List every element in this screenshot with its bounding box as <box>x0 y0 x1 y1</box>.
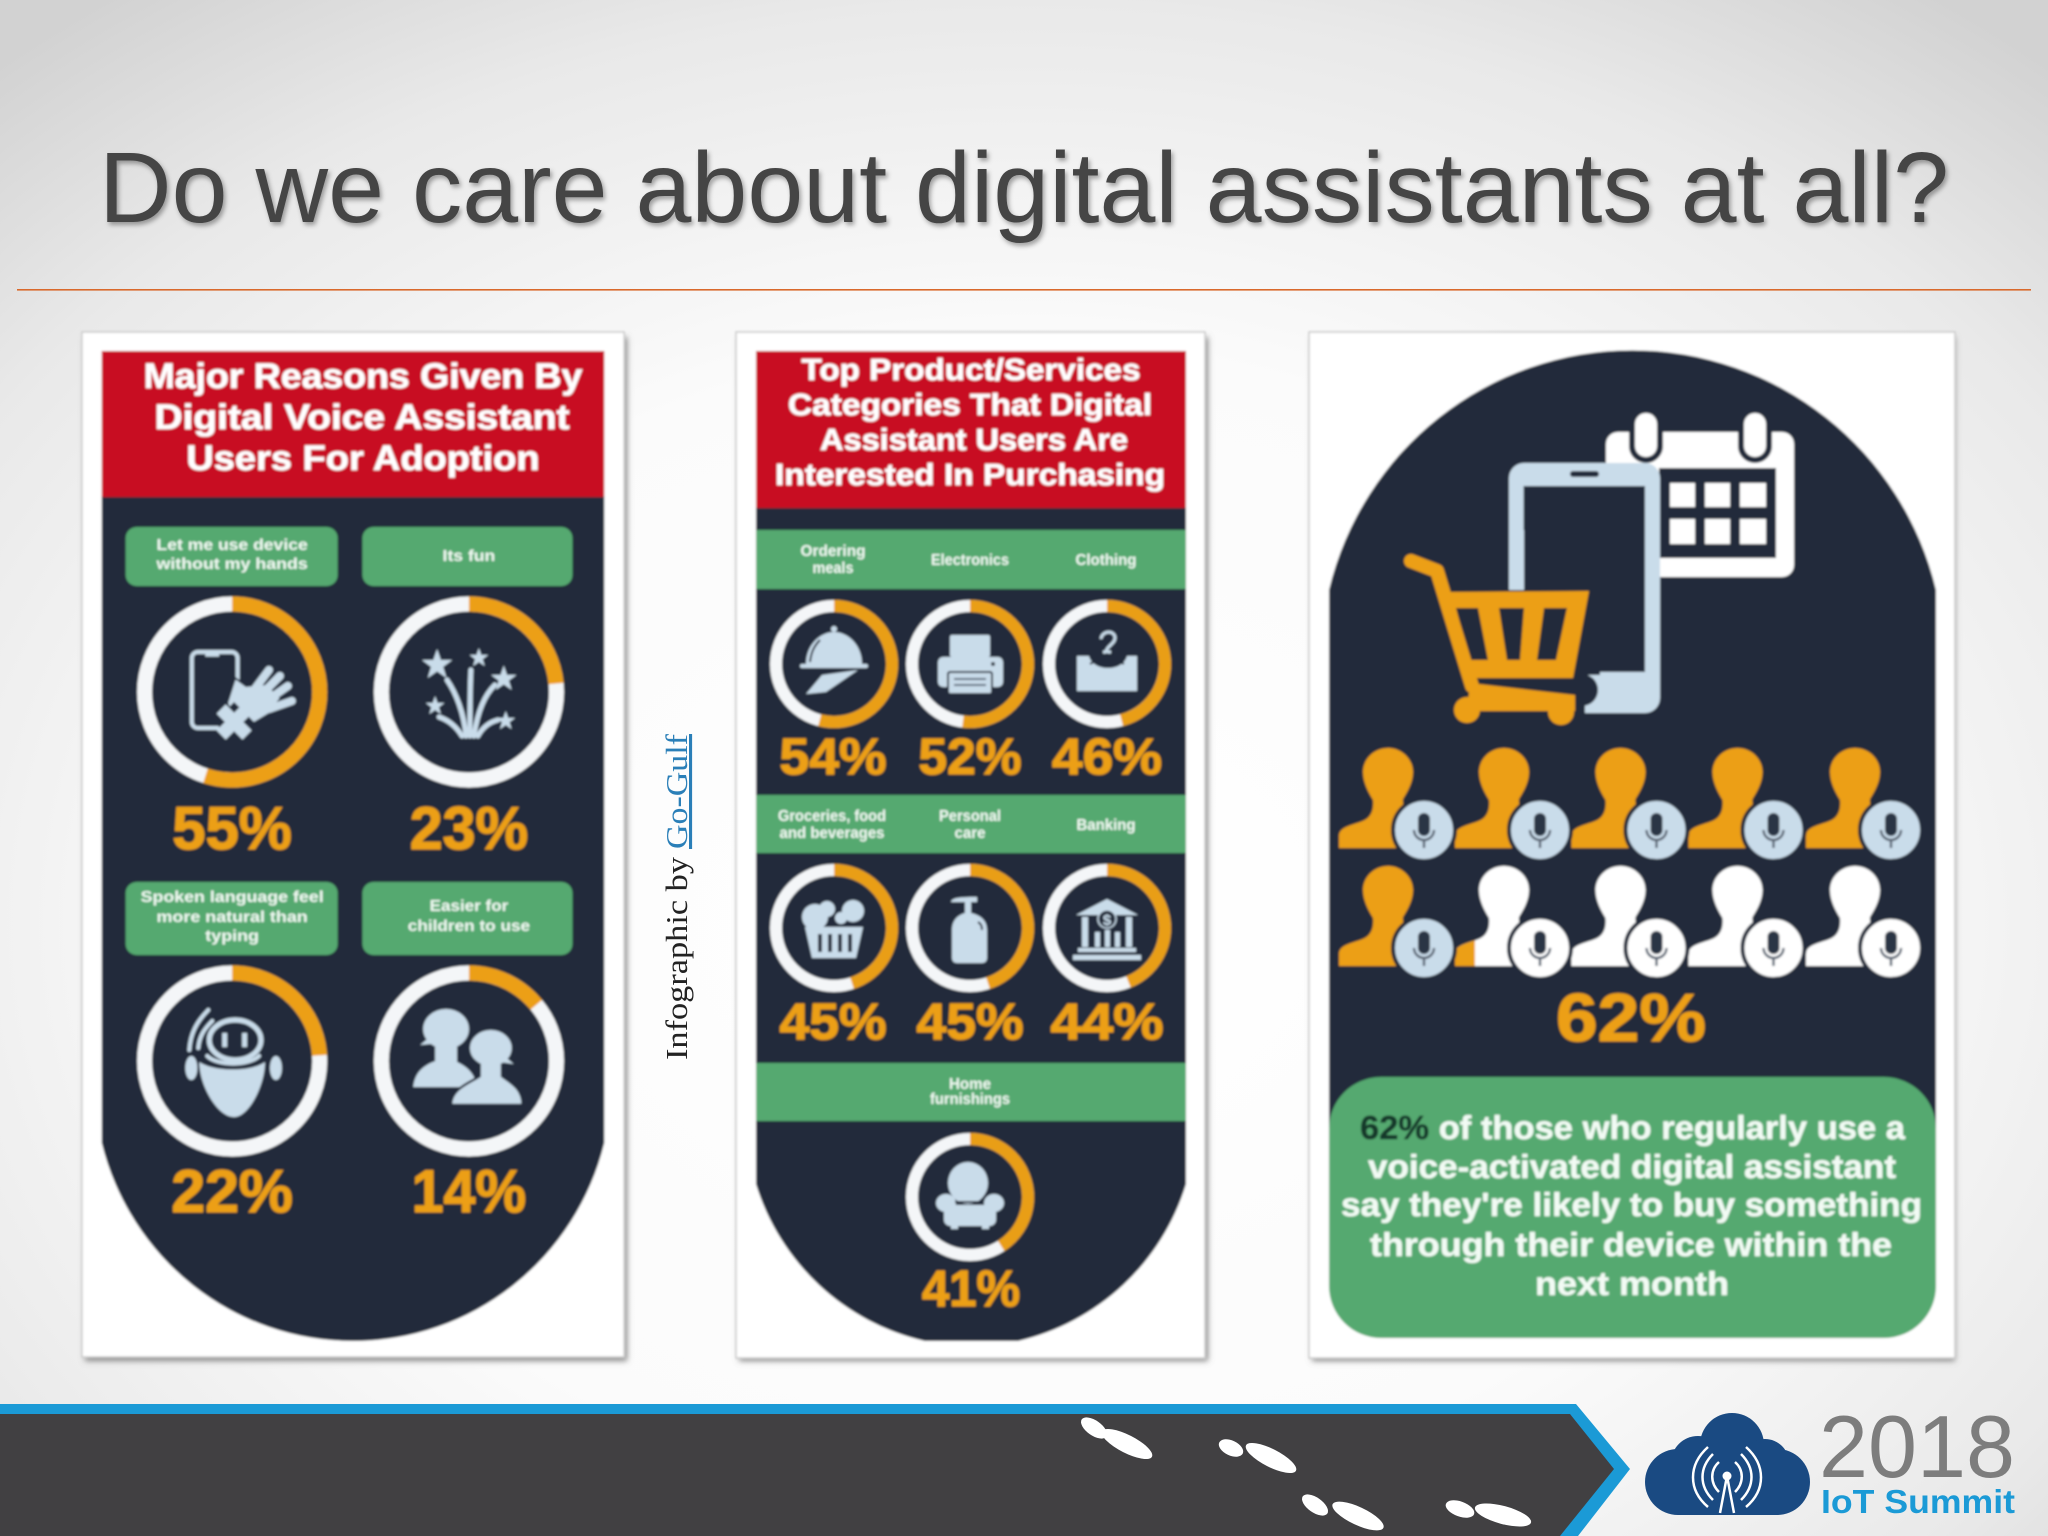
panel: adoption reasons <box>82 332 627 1361</box>
label: fun: Its fun <box>443 548 495 565</box>
gauge: 52 percent <box>912 606 1028 722</box>
label: natural language <box>126 882 338 955</box>
decoration: white footprints <box>1077 1413 1533 1536</box>
callout: likely buyers: through their device within the <box>1370 1226 1892 1263</box>
icon: grocery basket <box>802 900 864 958</box>
logo text: IoT Summit: IoT Summit <box>1821 1483 2015 1520</box>
attribution: Infographic by Go-Gulf: Go-Gulf <box>659 733 694 849</box>
heading: adoption reasons: Digital Voice Assistant <box>155 398 570 437</box>
value: 14 percent: 14% <box>412 1158 526 1225</box>
band: home furnishings <box>756 1063 1186 1121</box>
heading: purchase categories: Assistant Users Are <box>820 422 1128 457</box>
callout: likely buyers: voice-activated digital assistant <box>1368 1148 1896 1185</box>
band: first categories: Ordering <box>800 543 866 560</box>
band: home furnishings: furnishings <box>930 1091 1010 1108</box>
band: second categories: Groceries, food <box>778 808 886 825</box>
attribution: Infographic by Go-Gulf <box>659 733 694 1060</box>
callout: likely buyers <box>1329 1077 1936 1338</box>
gauge: 55 percent <box>145 604 320 780</box>
callout: likely buyers: say they're likely to buy something <box>1341 1186 1922 1223</box>
icon: calendar <box>1606 410 1794 577</box>
icon: armchair <box>936 1162 1004 1229</box>
panel: likely to buy <box>1309 332 1955 1361</box>
callout: likely buyers: next month <box>1535 1265 1729 1302</box>
label: hands free <box>126 527 338 586</box>
icon: robot <box>185 1010 282 1117</box>
label: hands free: Let me use device <box>157 537 308 554</box>
band: second categories: Personal <box>939 808 1001 825</box>
band: first categories: meals <box>812 560 854 577</box>
band: second categories <box>756 795 1186 853</box>
icon: clothing <box>1077 632 1137 691</box>
logo: IoT Summit cloud <box>1645 1413 1810 1515</box>
logo text: 2018: 2018 <box>1819 1397 2015 1496</box>
panel: purchase categories <box>736 332 1208 1361</box>
icon group: ten people with microphones <box>1339 748 1922 979</box>
label: children: children to use <box>408 918 530 935</box>
gauge: 14 percent <box>381 973 557 1149</box>
gauge: 44 percent <box>1049 870 1165 986</box>
icon: children <box>413 1009 523 1105</box>
gauge: 22 percent <box>145 973 320 1149</box>
gauge: 23 percent <box>381 604 557 780</box>
icon: smartphone <box>1500 463 1660 713</box>
label: natural language: more natural than <box>157 909 308 926</box>
value: 41 percent: 41% <box>922 1260 1020 1317</box>
attribution: Infographic by Go-Gulf: Infographic by <box>659 856 694 1060</box>
gauge: 46 percent <box>1049 606 1165 722</box>
label: children: Easier for <box>430 898 508 915</box>
value: 44 percent: 44% <box>1050 993 1164 1050</box>
value: 45 percent personal care: 45% <box>916 993 1024 1050</box>
icon: printer <box>938 635 1003 694</box>
gauge: 45 percent groceries <box>776 870 892 986</box>
value: 52 percent: 52% <box>918 728 1022 785</box>
band: home furnishings: Home <box>949 1076 991 1093</box>
heading: purchase categories: Categories That Digital <box>788 387 1152 422</box>
value: 46 percent: 46% <box>1052 728 1162 785</box>
value: 55 percent: 55% <box>172 795 292 862</box>
band: first categories <box>756 530 1186 589</box>
icon: shopping cart <box>1411 561 1589 725</box>
gauge: 45 percent personal care <box>912 870 1028 986</box>
label: children <box>362 882 572 955</box>
gauge: 41 percent <box>912 1139 1028 1255</box>
heading: adoption reasons <box>144 357 583 478</box>
callout: likely buyers: 62% of those who regularly use a <box>1360 1109 1906 1146</box>
band: second categories: Banking <box>1076 817 1136 834</box>
heading: purchase categories: Top Product/Services <box>802 352 1140 387</box>
value: 23 percent: 23% <box>410 795 528 862</box>
value: 62 percent: 62% <box>1556 980 1706 1056</box>
label: fun <box>362 527 572 586</box>
icon: fireworks <box>422 648 517 736</box>
icon: bank <box>1073 899 1141 960</box>
label: natural language: Spoken language feel <box>141 889 324 906</box>
band: first categories: Electronics <box>931 552 1009 569</box>
icon: food cloche <box>800 626 868 694</box>
title: Do we care about digital assistants at all? <box>99 132 1949 244</box>
value: 22 percent: 22% <box>171 1158 293 1225</box>
band: first categories: Clothing <box>1076 552 1136 569</box>
footer band with arrow <box>0 1404 1630 1536</box>
icon: phone and hand <box>192 652 292 742</box>
label: hands free: without my hands <box>155 556 308 573</box>
heading: purchase categories: Interested In Purchasing <box>775 457 1165 492</box>
icon: soap bottle <box>951 897 987 963</box>
label: natural language: typing <box>205 928 259 945</box>
gauge: 54 percent <box>776 606 892 722</box>
heading: adoption reasons: Major Reasons Given By <box>144 357 583 396</box>
value: 45 percent groceries: 45% <box>780 993 886 1050</box>
heading: purchase categories <box>775 352 1165 492</box>
value: 54 percent: 54% <box>780 728 886 785</box>
band: second categories: care <box>954 825 986 842</box>
band: second categories: and beverages <box>780 825 885 842</box>
heading: adoption reasons: Users For Adoption <box>186 439 540 478</box>
icon: bank: $ <box>1103 912 1112 929</box>
